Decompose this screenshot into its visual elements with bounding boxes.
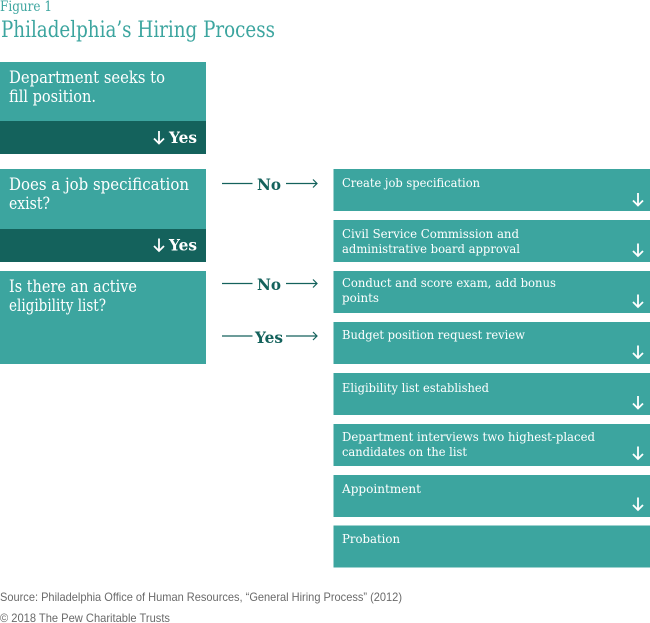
panel: is there an active eligibility list: Is there an active	[9, 277, 137, 297]
step: appointment	[334, 475, 650, 517]
panel: is there an active eligibility list	[0, 271, 206, 364]
step: budget position request review: Budget position request review	[342, 327, 525, 342]
step: probation: Probation	[342, 531, 400, 546]
panel: does a job specification exist: Does a job specification	[9, 175, 189, 195]
title: Philadelphia’s Hiring Process	[1, 18, 275, 43]
step: eligibility list established: Eligibility list established	[342, 380, 489, 395]
step: department interviews	[334, 424, 650, 466]
panel: department seeks to fill position: Department seeks to	[9, 68, 165, 88]
step: commission approval: Civil Service Commission and	[342, 226, 519, 241]
panel: department seeks to fill position	[0, 62, 206, 154]
panel: department seeks to fill position: fill position.	[9, 87, 96, 107]
step: appointment: Appointment	[341, 481, 421, 496]
arrow: no to create job specification: No	[257, 175, 281, 194]
step: eligibility list established	[334, 373, 650, 415]
source note: Source: Philadelphia Office of Human Resources, “General Hiring Process” (2012)	[0, 590, 402, 604]
arrow: yes to budget review	[222, 328, 317, 347]
step: department interviews: Department interviews two highest-placed	[342, 429, 595, 444]
arrow: yes to budget review: Yes	[254, 328, 283, 347]
step: conduct and score exam: points	[342, 290, 379, 305]
step: budget position request review	[334, 322, 650, 364]
panel: does a job specification exist: Yes	[168, 236, 197, 254]
step: department interviews: candidates on the list	[342, 444, 467, 459]
step: probation	[334, 526, 650, 568]
step: commission approval	[334, 220, 650, 262]
step: conduct and score exam: Conduct and score exam, add bonus	[342, 275, 556, 290]
step: commission approval: administrative board approval	[342, 241, 520, 256]
panel: does a job specification exist	[0, 169, 206, 262]
step: create job specification	[334, 169, 650, 211]
arrow: no to conduct exam: No	[257, 275, 281, 294]
panel: department seeks to fill position: Yes	[168, 128, 197, 147]
step: conduct and score exam	[334, 271, 650, 313]
step: create job specification: Create job specification	[342, 175, 480, 190]
arrow: no to conduct exam	[222, 275, 317, 294]
arrow: no to create job specification	[222, 175, 317, 194]
panel: does a job specification exist: exist?	[9, 194, 50, 214]
panel: is there an active eligibility list: eligibility list?	[9, 296, 106, 316]
